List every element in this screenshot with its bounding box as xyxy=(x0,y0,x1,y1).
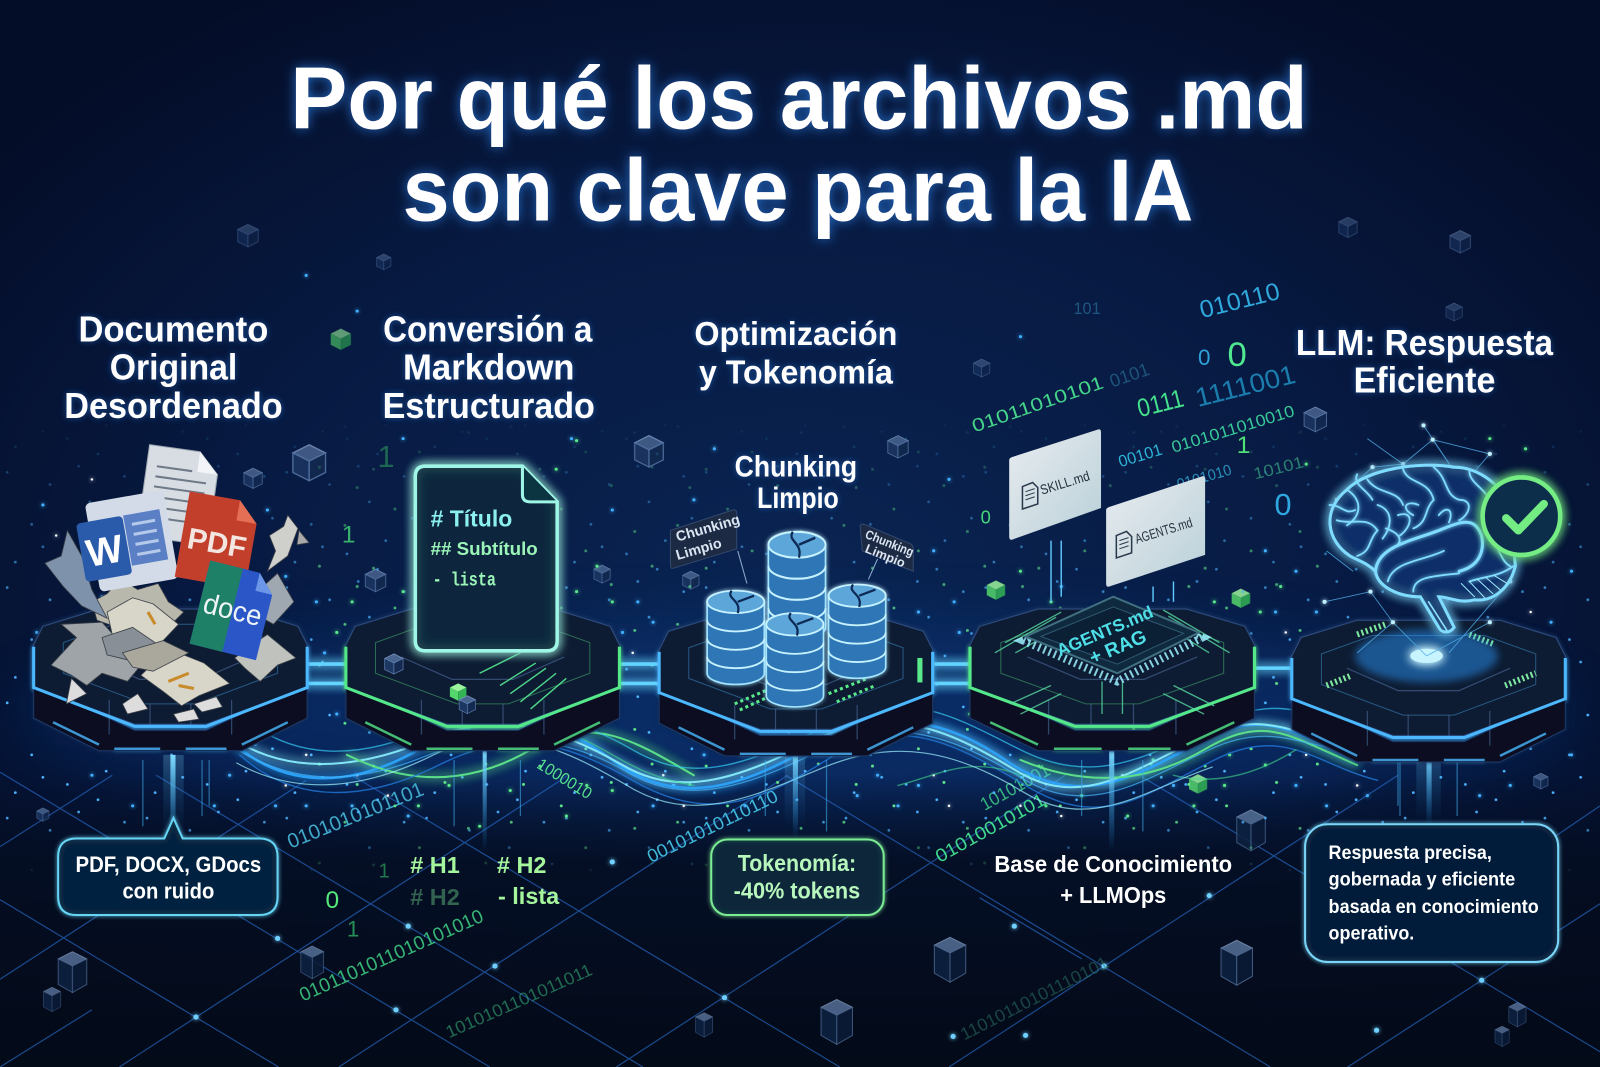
markdown samples: # H2 xyxy=(497,852,546,878)
binary streams: 1111001 xyxy=(1192,359,1298,413)
binary streams: 1 xyxy=(378,440,395,474)
binary streams: 0101010 xyxy=(1175,462,1234,493)
connector links between platforms xyxy=(306,664,1296,683)
binary streams: 10101 xyxy=(1252,454,1306,483)
markdown samples: # H1 xyxy=(410,852,460,878)
icon: Word file xyxy=(73,490,179,594)
icon: doce file xyxy=(190,561,277,660)
icon: PDF file: PDF xyxy=(185,522,249,565)
tag: chunking right: Limpio xyxy=(863,541,908,570)
binary streams: 0 xyxy=(326,887,339,914)
binary streams: 010110 xyxy=(1197,278,1283,324)
grid nodes xyxy=(196,862,1482,1036)
callout: efficient response: operativo. xyxy=(1329,922,1414,944)
platform 2: markdown conversion xyxy=(346,466,619,751)
card: AGENTS.md: AGENTS.md xyxy=(1133,515,1194,547)
heading: step 3 xyxy=(694,316,897,392)
binary streams: 0101010101101 xyxy=(284,779,427,853)
heading: step 3: Optimización xyxy=(694,316,897,353)
platform 4: knowledge base chip xyxy=(970,429,1254,751)
binary streams: 0101011010010 xyxy=(1169,402,1297,457)
flow ribbons between platforms xyxy=(219,707,1378,809)
binary streams: 1010101101011011 xyxy=(442,960,595,1042)
neural network xyxy=(1324,425,1510,656)
binary streams: 01011010101 xyxy=(969,372,1106,436)
binary streams: 01010010101 xyxy=(932,789,1049,866)
caption: knowledge base: + LLMOps xyxy=(1060,882,1166,908)
subheading: chunking limpio: Chunking xyxy=(735,450,857,483)
heading: step 1: Desordenado xyxy=(64,386,283,426)
icon: PDF file xyxy=(175,491,260,589)
callout: token reduction: -40% tokens xyxy=(734,878,860,904)
markdown samples xyxy=(410,852,560,910)
callout: source formats: PDF, DOCX, GDocs xyxy=(76,852,261,877)
markdown samples: - lista xyxy=(498,883,560,909)
binary streams: 1000010 xyxy=(534,755,595,803)
binary streams: 11010110101110101 xyxy=(957,952,1112,1044)
heading: step 3: y Tokenomía xyxy=(699,355,893,392)
callout: token reduction: Tokenomía: xyxy=(738,850,856,876)
heading: step 2: Estructurado xyxy=(383,386,595,426)
icon: markdown file: ## Subtítulo xyxy=(431,538,538,559)
data dust xyxy=(0,408,1600,877)
icon: markdown file xyxy=(415,466,557,651)
binary streams: 1 xyxy=(342,522,355,549)
icon: green check badge xyxy=(1483,477,1560,555)
binary streams: 00101 xyxy=(1116,441,1165,471)
callout: efficient response: gobernada y eficiente xyxy=(1329,868,1516,890)
chip: + RAG xyxy=(1086,626,1150,669)
heading: step 5 xyxy=(1296,323,1554,401)
binary streams: 101 xyxy=(1073,300,1101,318)
binary streams: 1 xyxy=(347,916,359,941)
heading: step 2 xyxy=(383,310,595,426)
icon: Word file: W xyxy=(83,527,127,576)
platform 1: messy documents xyxy=(34,445,309,751)
binary streams: 0 xyxy=(1274,488,1292,522)
binary streams: 10101001 xyxy=(976,759,1054,814)
caption: knowledge base xyxy=(994,851,1232,908)
heading: step 1: Documento xyxy=(79,310,268,350)
platform 5: LLM xyxy=(1292,425,1565,762)
binary streams: 1 xyxy=(1237,432,1250,459)
heading: step 5: LLM: Respuesta xyxy=(1296,323,1554,363)
binary streams: 0101 xyxy=(1107,358,1152,391)
heading: step 2: Conversión a xyxy=(383,310,593,350)
callout: efficient response xyxy=(1305,824,1558,962)
title xyxy=(290,50,1308,239)
database cylinders xyxy=(707,532,886,707)
binary streams xyxy=(284,278,1306,1044)
card: SKILL.md: SKILL.md xyxy=(1038,468,1092,498)
binary streams: 0101101011010101010 xyxy=(296,905,487,1006)
energy glow xyxy=(1355,629,1498,682)
platform 3: chunking xyxy=(659,510,933,756)
callout: token reduction xyxy=(711,840,884,915)
pile of torn paper xyxy=(45,515,309,722)
binary streams: 0 xyxy=(981,506,991,527)
callout: efficient response: basada en conocimiento xyxy=(1329,896,1539,918)
icon: brain xyxy=(1330,465,1515,632)
binary streams: 0111 xyxy=(1134,385,1187,423)
tag: chunking right xyxy=(860,524,916,579)
heading: step 2: Markdown xyxy=(403,347,574,387)
binary streams: 00101010110110 xyxy=(644,785,781,867)
card: SKILL.md xyxy=(1009,429,1101,540)
binary streams: 1 xyxy=(379,860,390,882)
caption: knowledge base: Base de Conocimiento xyxy=(994,851,1232,877)
icon: markdown file: # Título xyxy=(431,505,512,531)
tag: chunking right: Chunking xyxy=(863,526,916,559)
isometric floor grid xyxy=(0,772,1600,1067)
heading: step 5: Eficiente xyxy=(1354,361,1495,401)
icon: markdown file: - lista xyxy=(433,570,496,592)
markdown samples: # H2 xyxy=(410,884,460,910)
subheading: chunking limpio: Limpio xyxy=(757,482,839,515)
card: AGENTS.md xyxy=(1106,476,1205,587)
vertical light beams xyxy=(143,750,1457,852)
tag: chunking left: Limpio xyxy=(674,536,724,564)
beams to cards xyxy=(1051,541,1173,602)
callout: source formats: con ruido xyxy=(122,879,214,904)
subheading: chunking limpio xyxy=(735,450,857,515)
chip xyxy=(1023,597,1202,681)
callout: source formats xyxy=(58,818,278,915)
tag: chunking left xyxy=(670,510,747,583)
background cubes xyxy=(37,217,1548,1047)
binary streams: 0 xyxy=(1198,345,1210,370)
heading: step 1 xyxy=(64,310,283,426)
callout: efficient response: Respuesta precisa, xyxy=(1329,842,1492,864)
title: Por qué los archivos .md xyxy=(290,50,1308,148)
chip: AGENTS.md xyxy=(1053,602,1156,660)
title: son clave para la IA xyxy=(403,141,1193,239)
icon: text document xyxy=(137,445,220,545)
icon: doce file: doce xyxy=(200,588,265,633)
light particles xyxy=(37,275,1572,836)
heading: step 1: Original xyxy=(110,347,237,387)
binary streams: 0 xyxy=(1228,336,1247,374)
binary streams: 0101010111001 xyxy=(594,622,603,680)
tag: chunking left: Chunking xyxy=(674,512,742,546)
